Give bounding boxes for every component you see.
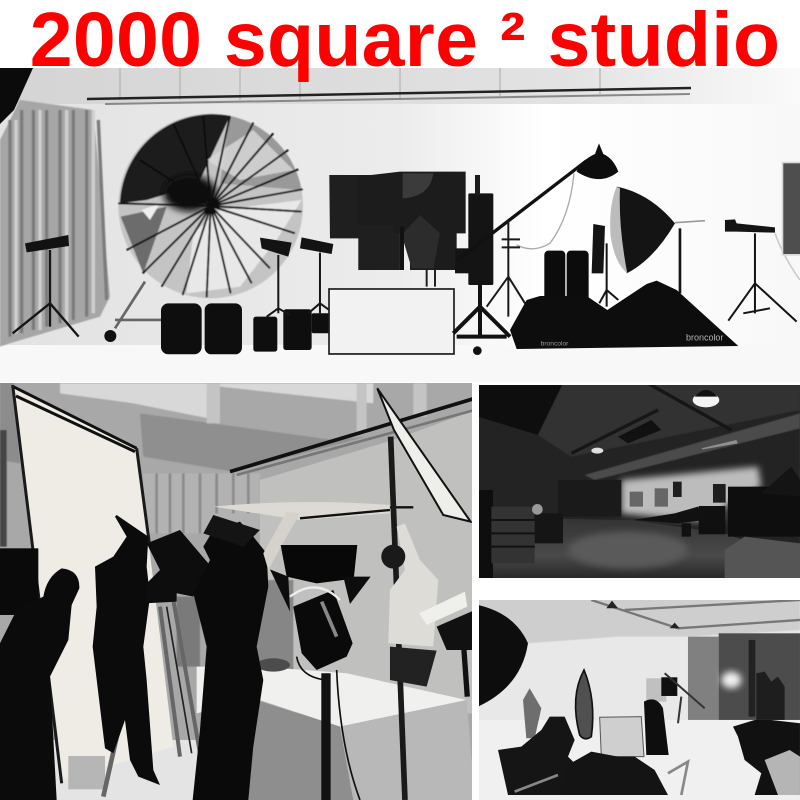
softbox [478, 605, 528, 707]
softbox corner [0, 68, 33, 124]
parabolic reflector [610, 187, 705, 293]
wall vent [782, 162, 800, 256]
model [523, 688, 541, 738]
central stand [453, 175, 510, 355]
brand label small: broncolor [541, 340, 569, 347]
small softbox on stand [646, 673, 705, 723]
pictures on wall [630, 482, 726, 507]
photo: studio equipment line-up [0, 68, 800, 382]
parabolic umbrella [118, 114, 303, 298]
lit back wall [621, 467, 761, 523]
ceiling pipes [87, 88, 691, 99]
back room [719, 633, 800, 720]
boom dish light [577, 143, 618, 179]
white table [197, 658, 475, 800]
left shelves [478, 490, 563, 580]
left light on stand [13, 235, 79, 337]
foreground cameraman [733, 720, 800, 795]
tripod [103, 600, 200, 797]
rail shadow [237, 410, 475, 475]
boom arm [493, 159, 586, 235]
top right reflector [377, 388, 471, 522]
back wall [260, 410, 475, 713]
boom stand [487, 220, 525, 317]
right light on stand [725, 219, 800, 322]
right shelves and cabinets [633, 467, 800, 537]
white backdrop frame [13, 385, 173, 783]
left equipment block [0, 548, 38, 615]
concrete column [688, 637, 719, 720]
hall ceiling [478, 380, 800, 480]
overhead rail [230, 398, 475, 472]
ceiling lamps [591, 390, 719, 454]
white reflector [329, 289, 454, 354]
woman at monitor [644, 699, 669, 755]
flag panels [371, 172, 466, 287]
camera operator [93, 515, 160, 785]
dark rear wall [558, 480, 621, 517]
sand bags [161, 303, 332, 354]
photo: film crew on set [0, 380, 475, 800]
lower light box [68, 756, 105, 789]
curtain [143, 473, 260, 533]
seated crew left [498, 717, 578, 795]
lamp glow [721, 672, 741, 688]
umbrella stand and wheel [104, 282, 162, 342]
tall stand pole [391, 437, 405, 800]
imac monitor [600, 717, 644, 757]
fresnel light [270, 545, 371, 800]
curtain [0, 100, 110, 347]
people in back room [756, 672, 785, 720]
bright ceiling [478, 598, 800, 643]
floor [54, 740, 198, 800]
ceiling [0, 380, 427, 547]
dark pillar [749, 640, 755, 717]
set dressing [177, 580, 293, 670]
table right [725, 537, 800, 580]
woman with ponytail [0, 568, 79, 800]
flag panel left [329, 175, 400, 270]
centre crew member [193, 512, 300, 800]
photo: shooting floor with monitor [478, 598, 800, 800]
softbox cases [510, 281, 738, 349]
floor reflection [568, 532, 688, 568]
crew member in white [381, 523, 438, 687]
small light right [419, 592, 475, 697]
horizontal reflector panel [213, 502, 413, 520]
middle lights on stands [260, 237, 333, 317]
oval reflector [576, 670, 593, 739]
crew heads foreground [561, 752, 668, 795]
floor [478, 720, 800, 800]
table edge [515, 762, 688, 795]
cinema camera [147, 530, 208, 603]
boom cable [517, 173, 574, 249]
floor [478, 518, 800, 580]
upright bags [544, 250, 589, 298]
brand label: broncolor [686, 333, 723, 343]
photo: dark studio hall [478, 380, 800, 580]
small head light [592, 224, 618, 307]
